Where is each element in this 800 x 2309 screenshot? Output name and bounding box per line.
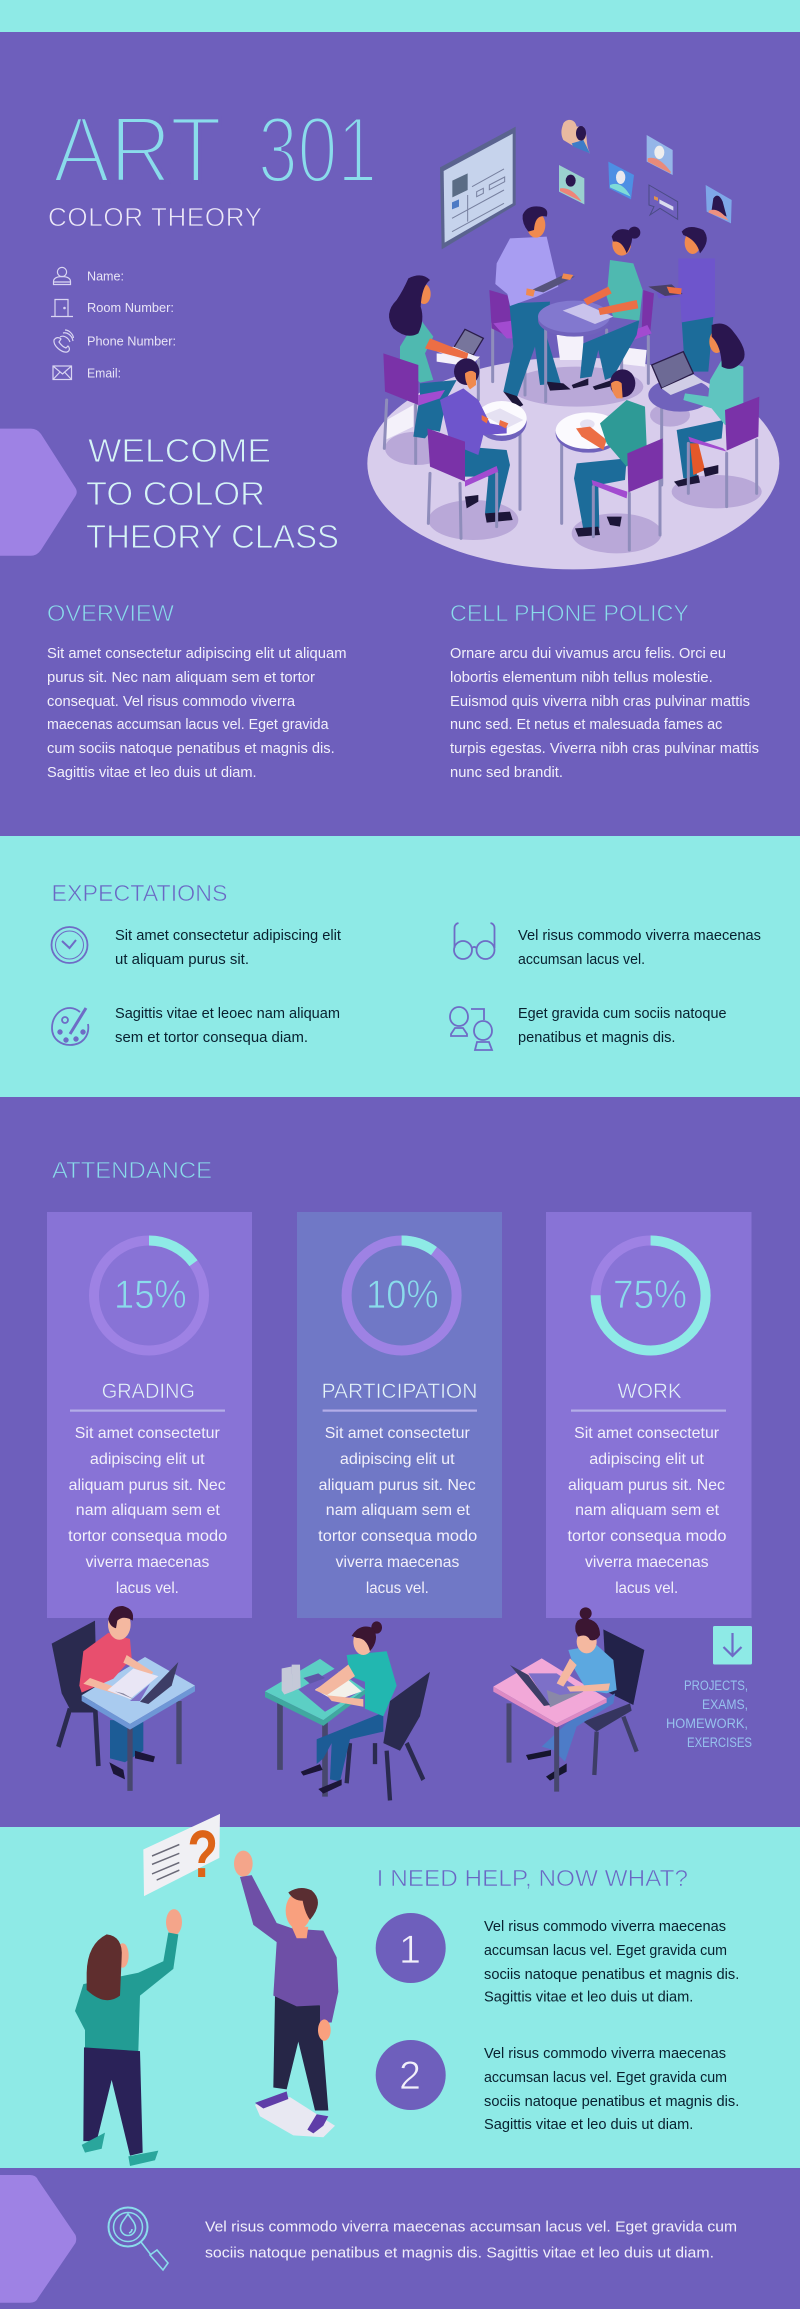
note: projects, exams, homework, exercises: [666, 1678, 752, 1751]
step 2 number: 2: [399, 2054, 421, 2098]
floating profile cards: [559, 120, 732, 223]
woman in teal: [75, 1909, 182, 2166]
card: work: [546, 1212, 752, 1618]
expectation text: punctuality: [115, 928, 341, 968]
heading: attendance: ATTENDANCE: [52, 1157, 212, 1183]
heading: welcome: TO COLOR: [86, 476, 265, 513]
icon: two people: [450, 1007, 492, 1050]
illustration: student at pink desk: [493, 1607, 644, 1792]
step 1 text: Vel risus commodo viverra maecenas: [484, 1919, 726, 1935]
expectation text: teamwork: Eget gravida cum sociis natoque: [518, 1006, 726, 1022]
heading: cell phone policy: CELL PHONE POLICY: [450, 600, 689, 626]
card text: work: tortor consequa modo: [567, 1528, 727, 1545]
donut chart: 15%: 15%: [114, 1273, 187, 1317]
policy paragraph: [450, 646, 759, 781]
section: overview: [47, 600, 346, 781]
central round table: [538, 301, 613, 402]
overview paragraph: cum sociis natoque penatibus et magnis dis.: [47, 741, 335, 757]
label: phone number: Phone Number:: [87, 334, 176, 349]
card text: work: adipiscing elit ut: [589, 1451, 705, 1468]
expectation text: teamwork: penatibus et magnis dis.: [518, 1030, 676, 1046]
policy paragraph: Euismod quis viverra nibh cras pulvinar mattis: [450, 694, 750, 710]
icon: door: [51, 300, 73, 316]
card text: grading: lacus vel.: [116, 1580, 179, 1597]
floor shadows: [385, 367, 762, 553]
card heading: work: WORK: [618, 1379, 682, 1403]
card text: participation: tortor consequa modo: [318, 1528, 478, 1545]
icon: clock: [52, 927, 88, 963]
step 2 text: accumsan lacus vel. Eget gravida cum: [484, 2070, 727, 2086]
expectation text: punctuality: ut aliquam purus sit.: [115, 952, 249, 968]
card text: grading: aliquam purus sit. Nec: [69, 1477, 226, 1494]
illustration: student at teal desk: [265, 1621, 430, 1800]
woman with bun: [572, 227, 643, 390]
icon: envelope: [53, 366, 72, 380]
right table with laptop: [648, 352, 712, 483]
girl at right with laptop: [674, 323, 759, 507]
overview paragraph: consequat. Vel risus commodo viverra: [47, 694, 296, 710]
top teal strip: [0, 0, 800, 32]
man in purple: [234, 1851, 338, 2137]
expectation text: reading: [518, 928, 761, 968]
wall board: [440, 127, 516, 249]
step 2 text: Sagittis vitae et leo duis ut diam.: [484, 2117, 693, 2133]
expectation text: teamwork: [518, 1006, 726, 1046]
title: ART 301: [53, 97, 377, 202]
card text: work: viverra maecenas: [585, 1554, 709, 1571]
icon: person: [54, 267, 70, 284]
policy paragraph: Ornare arcu dui vivamus arcu felis. Orci eu: [450, 646, 726, 662]
expectation text: creativity: [115, 1006, 340, 1046]
step 1 text: Sagittis vitae et leo duis ut diam.: [484, 1990, 693, 2006]
overview paragraph: Sit amet consectetur adipiscing elit ut aliquam: [47, 646, 346, 662]
panel: header purple background: [0, 32, 800, 836]
expectation text: creativity: sem et tortor consequa diam.: [115, 1030, 308, 1046]
card text: grading: viverra maecenas: [86, 1554, 209, 1571]
right back chair: [608, 290, 654, 383]
heading: overview: OVERVIEW: [47, 600, 175, 626]
question card: [143, 1814, 220, 1896]
step 1 text: accumsan lacus vel. Eget gravida cum: [484, 1943, 727, 1959]
note: projects, exams, homework, exercises: PROJECTS,: [684, 1678, 748, 1694]
arrow tab: footer: [0, 2175, 76, 2303]
donut chart: 75%: 75%: [613, 1273, 687, 1317]
arrow tab: welcome: [0, 429, 77, 556]
card: participation: [297, 1212, 502, 1618]
step 2 number: [376, 2040, 446, 2110]
illustration: two people reaching for question card: [75, 1814, 338, 2166]
card text: participation: [318, 1425, 478, 1597]
question card: ?: [187, 1817, 218, 1892]
expectation text: creativity: Sagittis vitae et leoec nam aliquam: [115, 1006, 340, 1022]
footer text: sociis natoque penatibus et magnis dis. Sagittis vitae et leo duis ut diam.: [205, 2246, 714, 2262]
step 1 text: [484, 1919, 739, 2006]
panel: footer: [0, 2168, 800, 2309]
icon: paint palette: [52, 1008, 88, 1045]
card: grading: [47, 1212, 252, 1618]
section: help steps: [376, 1865, 739, 2133]
label: name: Name:: [87, 268, 124, 284]
contact details list: [51, 267, 176, 381]
step 1 number: [376, 1913, 446, 1983]
heading: welcome: WELCOME: [88, 433, 271, 470]
card text: work: lacus vel.: [615, 1580, 678, 1597]
icon: magnifier with droplet: [108, 2208, 168, 2270]
card text: participation: aliquam purus sit. Nec: [319, 1477, 476, 1494]
left girl with laptop: [383, 275, 483, 463]
section: cell phone policy: [450, 600, 759, 781]
panel: expectations: [0, 836, 800, 1097]
light patches: [385, 333, 647, 440]
card text: work: Sit amet consectetur: [574, 1425, 719, 1442]
icon: down arrow: [724, 1633, 742, 1656]
donut chart: 75%: [596, 1240, 706, 1350]
expectation text: reading: accumsan lacus vel.: [518, 952, 645, 968]
card text: work: [568, 1425, 727, 1597]
panel: help background: [0, 1827, 800, 2168]
card text: work: aliquam purus sit. Nec: [568, 1477, 725, 1494]
card text: participation: lacus vel.: [366, 1580, 429, 1597]
policy paragraph: nunc sed brandit.: [450, 765, 563, 781]
standing man with tablet: [495, 206, 575, 408]
card text: participation: nam aliquam sem et: [326, 1502, 470, 1519]
front-left table and seated man: [427, 358, 527, 538]
expectation text: reading: Vel risus commodo viverra maecenas: [518, 928, 761, 944]
note: projects, exams, homework, exercises: EXAMS,: [702, 1697, 748, 1713]
overview paragraph: maecenas accumsan lacus vel. Eget gravida: [47, 717, 329, 733]
front-centre table and seated man: [556, 369, 663, 550]
download arrow button: [713, 1626, 752, 1664]
card heading: grading: GRADING: [102, 1379, 195, 1403]
step 2 text: [484, 2046, 739, 2133]
card text: participation: Sit amet consectetur: [325, 1425, 470, 1442]
card text: participation: adipiscing elit ut: [340, 1451, 455, 1468]
footer text: [205, 2220, 737, 2262]
label: room number: Room Number:: [87, 300, 174, 315]
illustration: student at blue desk: [52, 1606, 195, 1791]
policy paragraph: lobortis elementum nibh tellus molestie.: [450, 670, 713, 686]
title: ART 301: 301: [258, 97, 377, 202]
icon: glasses: [454, 923, 494, 959]
heading: welcome: THEORY CLASS: [86, 519, 339, 556]
floor ellipse: [367, 357, 779, 569]
icon: phone: [54, 330, 74, 352]
heading: i need help: I NEED HELP, NOW WHAT?: [377, 1865, 688, 1891]
title: ART 301: ART: [53, 97, 222, 202]
overview paragraph: Sagittis vitae et leo duis ut diam.: [47, 765, 257, 781]
subtitle: color theory: COLOR THEORY: [48, 202, 262, 232]
footer text: Vel risus commodo viverra maecenas accumsan lacus vel. Eget gravida cum: [205, 2220, 737, 2236]
card text: work: nam aliquam sem et: [575, 1502, 720, 1519]
overview paragraph: [47, 646, 346, 781]
card text: grading: Sit amet consectetur: [75, 1425, 220, 1442]
card text: grading: adipiscing elit ut: [90, 1451, 205, 1468]
donut chart: 15%: [94, 1240, 204, 1350]
overview paragraph: purus sit. Nec nam aliquam sem et tortor: [47, 670, 315, 686]
note: projects, exams, homework, exercises: EXERCISES: [687, 1735, 752, 1751]
donut chart: 10%: [347, 1240, 457, 1350]
donut chart: 10%: 10%: [366, 1273, 439, 1317]
back chair: [489, 290, 525, 395]
card text: grading: [68, 1425, 228, 1597]
expectation text: punctuality: Sit amet consectetur adipiscing elit: [115, 928, 341, 944]
label: email: Email:: [87, 366, 121, 381]
policy paragraph: turpis egestas. Viverra nibh cras pulvinar mattis: [450, 741, 759, 757]
heading: welcome: [86, 433, 339, 556]
card heading: participation: PARTICIPATION: [322, 1379, 477, 1403]
card text: grading: tortor consequa modo: [68, 1528, 228, 1545]
step 2 text: Vel risus commodo viverra maecenas: [484, 2046, 726, 2062]
panel: attendance background: [0, 1097, 800, 1827]
heading: expectations: EXPECTATIONS: [52, 880, 228, 906]
step 2 text: sociis natoque penatibus et magnis dis.: [484, 2094, 739, 2110]
policy paragraph: nunc sed. Et netus et malesuada fames ac: [450, 717, 722, 733]
step 1 number: 1: [399, 1928, 421, 1972]
standing man at right: [648, 227, 715, 372]
card text: grading: nam aliquam sem et: [76, 1502, 220, 1519]
note: projects, exams, homework, exercises: HOMEWORK,: [666, 1716, 748, 1732]
illustration: classroom group discussion: [367, 120, 779, 569]
card text: participation: viverra maecenas: [336, 1554, 459, 1571]
step 1 text: sociis natoque penatibus et magnis dis.: [484, 1967, 739, 1983]
